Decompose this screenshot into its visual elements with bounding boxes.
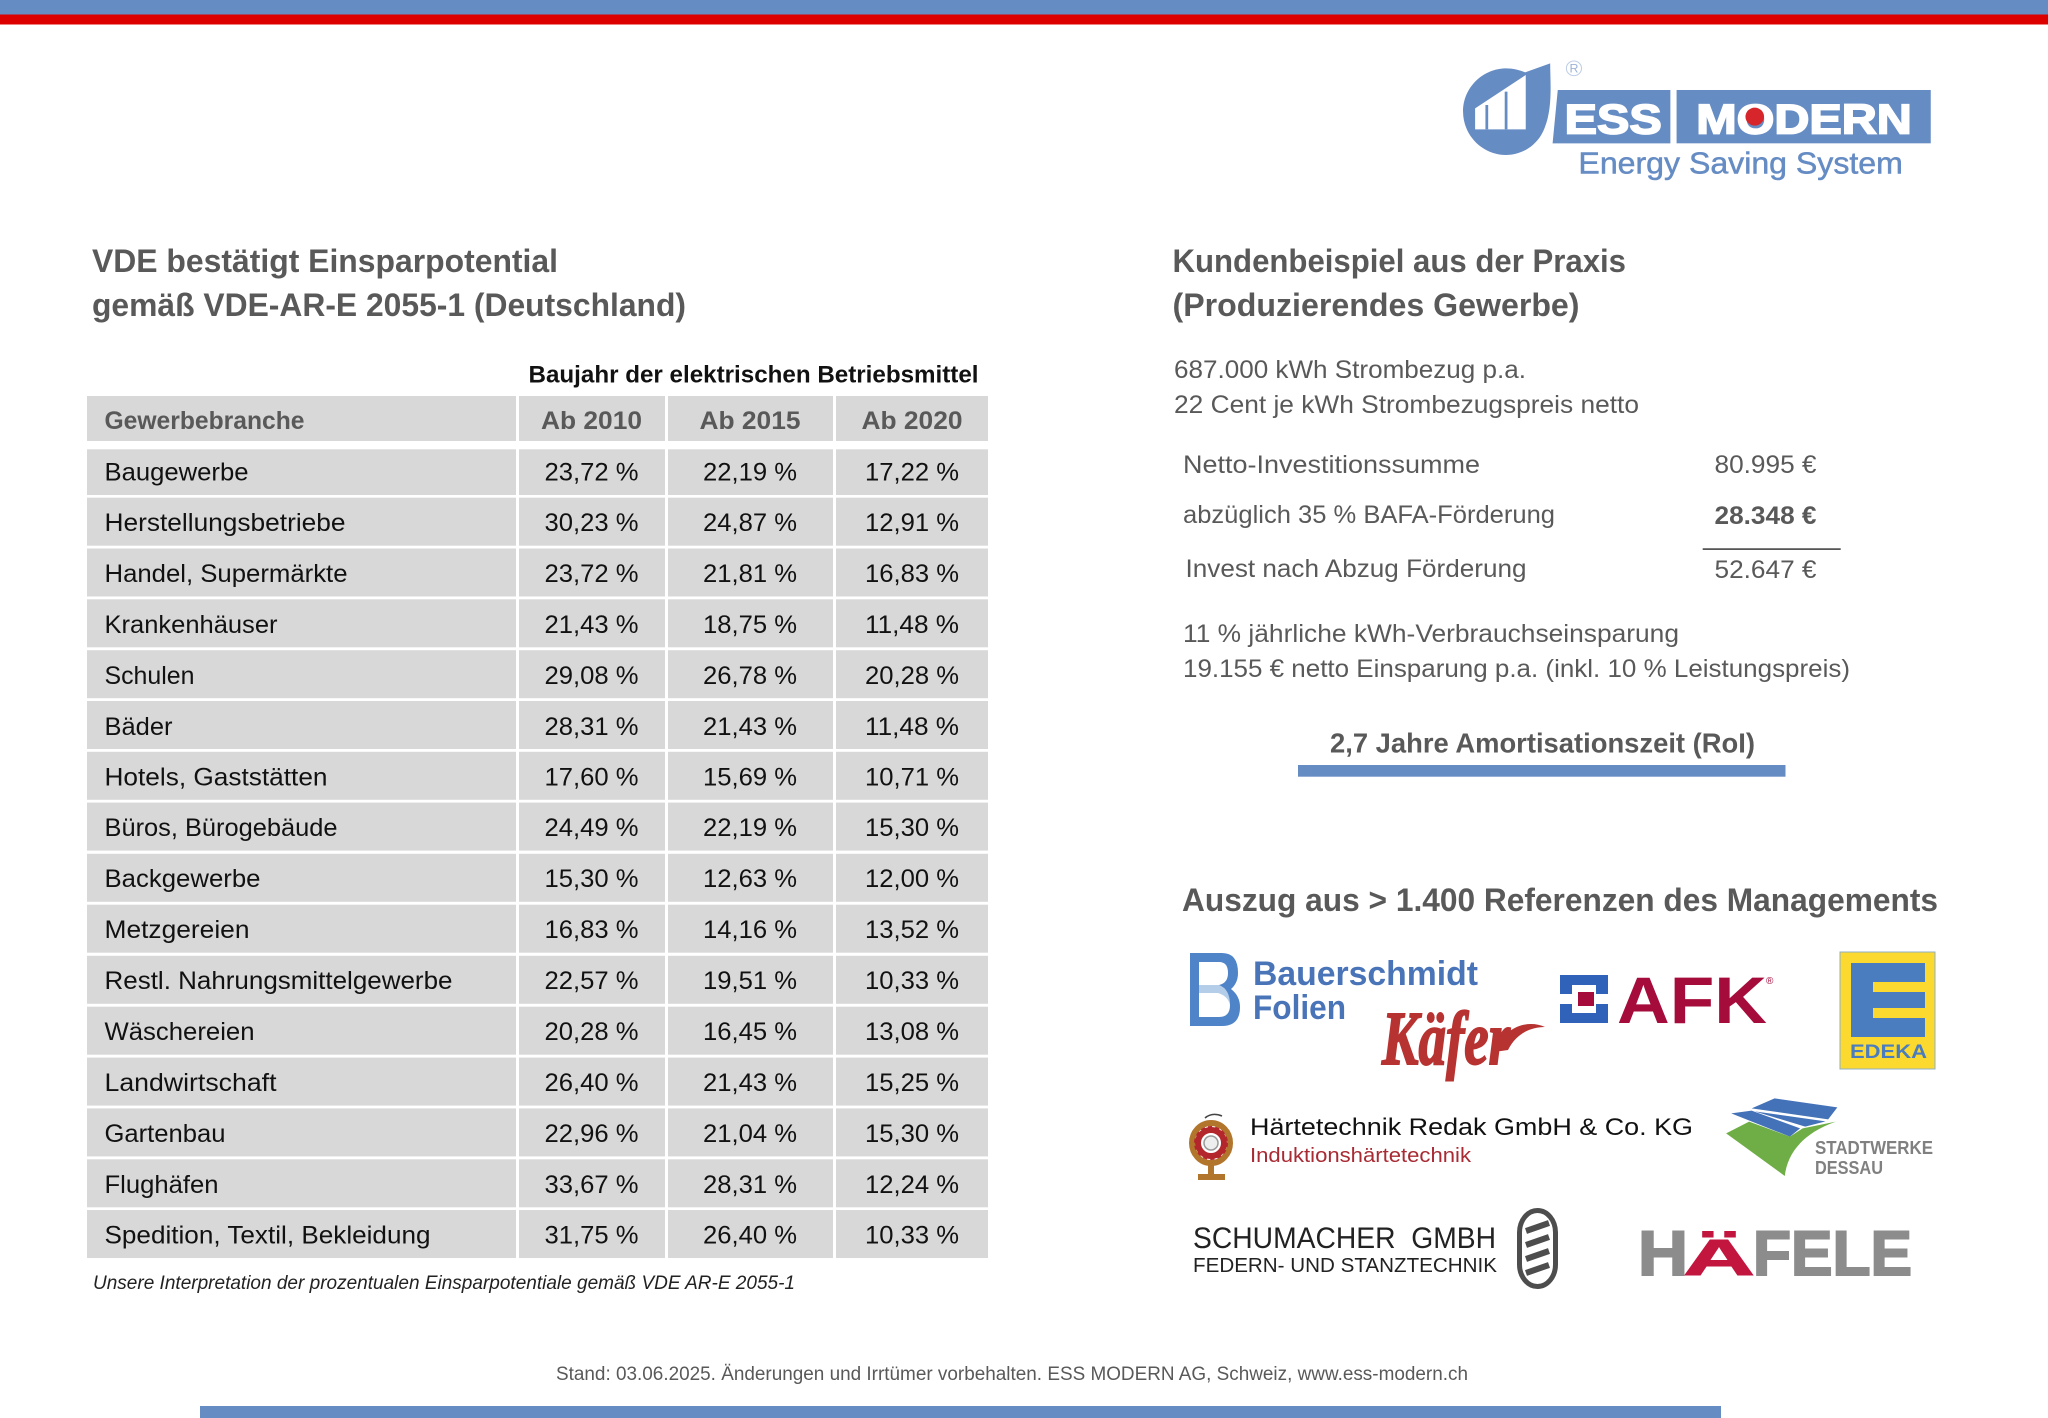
right heading: Kundenbeispiel aus der Praxis [1172,243,1626,279]
row: Hotels, Gaststätten [87,752,988,800]
logo: Bauerschmidt Folien: Bauerschmidt [1253,955,1478,993]
row: Gartenbau: 15,30 % [865,1120,959,1148]
investment calculation [1183,451,1841,584]
investment calculation: Invest nach Abzug Förderung [1186,555,1526,583]
top header bars [0,0,2048,24]
row: Handel, Supermärkte: 23,72 % [544,560,638,588]
row: Restl. Nahrungsmittelgewerbe: Restl. Nahrungsmittelgewerbe [104,967,452,995]
row: Baugewerbe: 22,19 % [703,458,797,486]
customer facts: 22 Cent je kWh Strombezugspreis netto [1174,391,1639,419]
table header row [87,396,988,441]
row: Krankenhäuser: Krankenhäuser [104,611,278,639]
logo: ESS MODERN [1463,61,1931,180]
row: Metzgereien: Metzgereien [104,916,250,944]
row: Backgewerbe: Backgewerbe [104,865,260,893]
savings table [87,396,988,1258]
footer bar [200,1406,1721,1418]
logo tagline: Energy Saving System [1578,146,1903,180]
row: Landwirtschaft: 15,25 % [865,1069,959,1097]
row: Wäschereien: Wäschereien [104,1018,255,1046]
table header row: Gewerbebranche [104,407,305,435]
investment calculation: 28.348 € [1714,502,1817,530]
callout: payback period [1298,728,1786,777]
row: Landwirtschaft: 21,43 % [703,1069,797,1097]
row: Büros, Bürogebäude: 15,30 % [865,814,959,842]
row: Landwirtschaft: Landwirtschaft [104,1069,277,1097]
row: Gartenbau: 21,04 % [703,1120,797,1148]
left heading [92,243,686,323]
row: Spedition, Textil, Bekleidung: 31,75 % [544,1222,638,1250]
row: Hotels, Gaststätten: 15,69 % [703,764,797,792]
row: Handel, Supermärkte: Handel, Supermärkte [104,560,348,588]
row: Herstellungsbetriebe: Herstellungsbetriebe [104,509,346,537]
row: Metzgereien: 14,16 % [703,916,797,944]
logo: AFK [1560,963,1774,1037]
investment calculation: Netto-Investitionssumme [1183,451,1480,479]
row: Gartenbau: Gartenbau [104,1120,226,1148]
left heading: VDE bestätigt Einsparpotential [92,243,558,279]
row: Krankenhäuser: 21,43 % [544,611,638,639]
right heading: (Produzierendes Gewerbe) [1172,287,1580,323]
row: Landwirtschaft: 26,40 % [544,1069,638,1097]
logo: Häfele: FELE [1753,1219,1912,1289]
row: Schulen [87,650,988,698]
row: Bäder: Bäder [104,713,172,741]
table header row: Ab 2020 [862,407,962,435]
row: Schulen: 20,28 % [865,662,959,690]
row: Metzgereien: 13,52 % [865,916,959,944]
row: Baugewerbe [87,449,988,495]
footer note: Stand: 03.06.2025. Änderungen und Irrtümer vorbehalten. ESS MODERN AG, Schweiz, www.ess-modern.ch [556,1364,1468,1385]
logo: Schumacher GmbH [1193,1210,1556,1286]
logo: Stadtwerke Dessau: DESSAU [1815,1158,1883,1178]
row: Schulen: 26,78 % [703,662,797,690]
row: Metzgereien [87,905,988,953]
logo: Häfele: H [1638,1219,1688,1289]
row: Bäder [87,701,988,749]
row: Baugewerbe: 23,72 % [544,458,638,486]
row: Hotels, Gaststätten: 10,71 % [865,764,959,792]
row: Restl. Nahrungsmittelgewerbe [87,956,988,1004]
row: Krankenhäuser: 11,48 % [865,611,959,639]
row: Wäschereien: 20,28 % [544,1018,638,1046]
icon: logo drop with bars [1463,63,1551,155]
savings text [1183,620,1850,683]
row: Hotels, Gaststätten: Hotels, Gaststätten [104,764,328,792]
row: Krankenhäuser: 18,75 % [703,611,797,639]
logo: AFK: AFK [1617,963,1767,1037]
row: Restl. Nahrungsmittelgewerbe: 19,51 % [703,967,797,995]
row: Flughäfen: 28,31 % [703,1171,797,1199]
registered mark: R [1569,62,1579,76]
row: Bäder: 11,48 % [865,713,959,741]
row: Schulen: 29,08 % [544,662,638,690]
row: Herstellungsbetriebe [87,498,988,546]
table super-heading: Baujahr der elektrischen Betriebsmittel [528,362,978,388]
row: Baugewerbe: 17,22 % [865,458,959,486]
row: Restl. Nahrungsmittelgewerbe: 22,57 % [544,967,638,995]
row: Herstellungsbetriebe: 30,23 % [544,509,638,537]
logo: Schumacher GmbH: FEDERN- UND STANZTECHNIK [1193,1255,1498,1277]
row: Spedition, Textil, Bekleidung: 26,40 % [703,1222,797,1250]
logo: Häfele [1638,1219,1912,1289]
row: Herstellungsbetriebe: 24,87 % [703,509,797,537]
logo: EDEKA: EDEKA [1850,1042,1927,1063]
investment calculation: abzüglich 35 % BAFA-Förderung [1183,501,1555,529]
row: Backgewerbe: 12,63 % [703,865,797,893]
logo: Käfer: Käfer [1381,997,1511,1081]
logo: Härtetechnik Redak: Induktionshärtetechnik [1250,1145,1472,1167]
row: Flughäfen [87,1159,988,1207]
row: Wäschereien: 16,45 % [703,1018,797,1046]
registered mark [1566,61,1582,76]
row: Spedition, Textil, Bekleidung [87,1210,988,1258]
row: Backgewerbe [87,854,988,902]
row: Handel, Supermärkte: 16,83 % [865,560,959,588]
logo: AFK: ® [1766,976,1774,987]
row: Landwirtschaft [87,1058,988,1106]
row: Gartenbau: 22,96 % [544,1120,638,1148]
right heading [1172,243,1626,323]
row: Büros, Bürogebäude: 24,49 % [544,814,638,842]
row: Wäschereien [87,1007,988,1055]
row: Bäder: 28,31 % [544,713,638,741]
row: Backgewerbe: 12,00 % [865,865,959,893]
logo: Bauerschmidt Folien [1190,953,1478,1027]
row: Backgewerbe: 15,30 % [544,865,638,893]
investment calculation: 52.647 € [1714,556,1817,584]
row: Krankenhäuser [87,599,988,647]
logo: Häfele: Ä [1683,1229,1755,1286]
row: Wäschereien: 13,08 % [865,1018,959,1046]
row: Hotels, Gaststätten: 17,60 % [544,764,638,792]
row: Gartenbau [87,1108,988,1156]
ESS wordmark: ESS [1565,96,1662,143]
row: Restl. Nahrungsmittelgewerbe: 10,33 % [865,967,959,995]
savings text: 19.155 € netto Einsparung p.a. (inkl. 10 % Leistungspreis) [1183,655,1850,683]
table header row: Ab 2010 [541,407,642,435]
table header row: Ab 2015 [700,407,801,435]
investment calculation: 80.995 € [1714,451,1817,479]
row: Spedition, Textil, Bekleidung: Spedition, Textil, Bekleidung [104,1222,430,1250]
logo: Bauerschmidt Folien: Folien [1253,989,1346,1027]
MODERN wordmark: MODERN [1696,96,1912,142]
logo: Schumacher GmbH: SCHUMACHER GMBH [1193,1222,1496,1255]
left heading: gemäß VDE-AR-E 2055-1 (Deutschland) [92,287,686,323]
row: Herstellungsbetriebe: 12,91 % [865,509,959,537]
savings text: 11 % jährliche kWh-Verbrauchseinsparung [1183,620,1679,648]
logo: Härtetechnik Redak: Härtetechnik Redak GmbH & Co. KG [1250,1114,1693,1141]
references heading: Auszug aus > 1.400 Referenzen des Managements [1182,882,1938,918]
logo: EDEKA [1840,952,1935,1069]
row: Handel, Supermärkte: 21,81 % [703,560,797,588]
row: Flughäfen: 12,24 % [865,1171,959,1199]
table footnote: Unsere Interpretation der prozentualen Einsparpotentiale gemäß VDE AR-E 2055-1 [93,1273,795,1294]
logo: Stadtwerke Dessau [1726,1098,1933,1178]
row: Baugewerbe: Baugewerbe [104,458,248,486]
customer facts: 687.000 kWh Strombezug p.a. [1174,356,1526,384]
row: Bäder: 21,43 % [703,713,797,741]
row: Büros, Bürogebäude: 22,19 % [703,814,797,842]
row: Büros, Bürogebäude [87,803,988,851]
logo: Härtetechnik Redak [1192,1114,1693,1180]
row: Schulen: Schulen [104,662,194,690]
ESS wordmark [1553,90,1670,143]
row: Metzgereien: 16,83 % [544,916,638,944]
callout: payback period: 2,7 Jahre Amortisationszeit (RoI) [1330,728,1755,758]
row: Handel, Supermärkte [87,548,988,596]
customer facts [1174,356,1639,419]
row: Büros, Bürogebäude: Büros, Bürogebäude [104,814,338,842]
MODERN wordmark [1677,90,1931,143]
row: Spedition, Textil, Bekleidung: 10,33 % [865,1222,959,1250]
row: Flughäfen: 33,67 % [544,1171,638,1199]
row: Flughäfen: Flughäfen [104,1171,218,1199]
logo: Stadtwerke Dessau: STADTWERKE [1815,1138,1933,1158]
